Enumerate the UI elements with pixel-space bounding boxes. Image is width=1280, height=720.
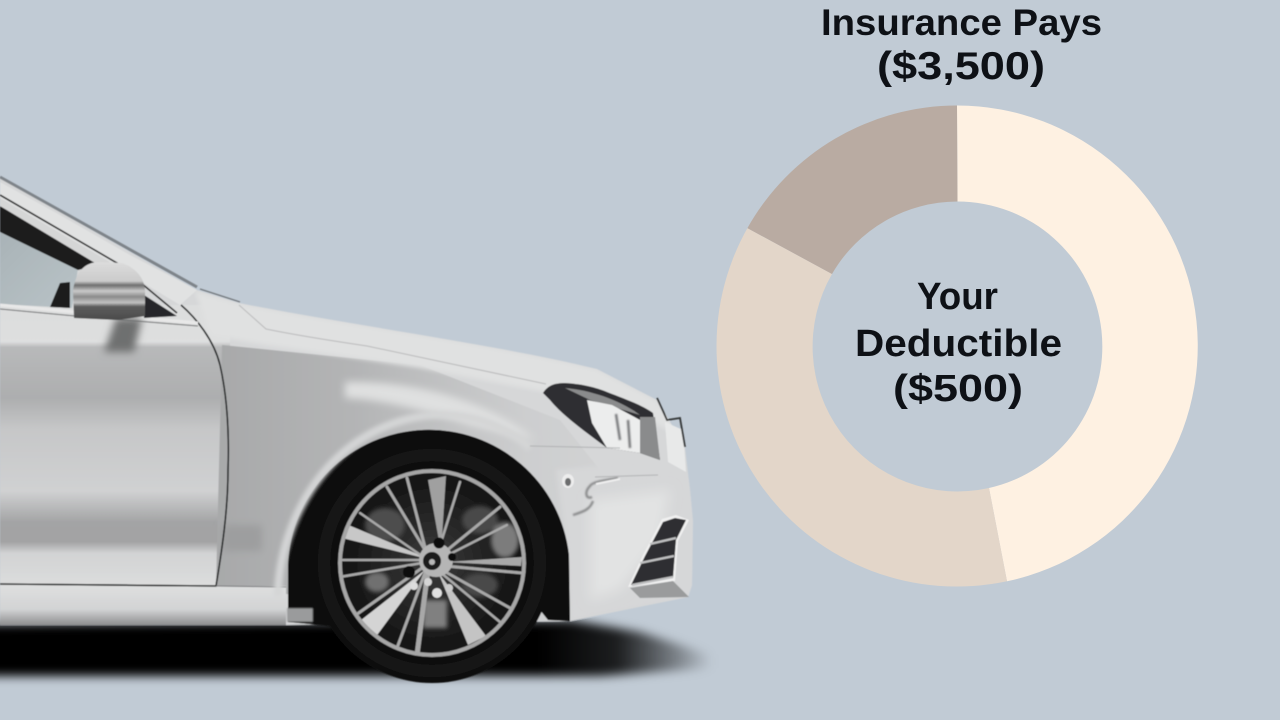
rim outer ring xyxy=(340,471,524,655)
segment: mid beige xyxy=(716,228,1007,587)
car: silver sedan front quarter xyxy=(0,170,712,683)
mirror stalk shadow xyxy=(104,318,142,352)
headlight side panel xyxy=(640,417,660,460)
windshield edge xyxy=(0,177,197,287)
segment: deductible share, taupe xyxy=(747,106,958,274)
tire xyxy=(312,443,552,683)
dent damage xyxy=(562,474,620,515)
windshield base edge xyxy=(200,289,240,302)
hood surface xyxy=(200,296,670,426)
door panel xyxy=(0,344,230,552)
lower body line xyxy=(216,586,286,587)
a-pillar lower strip xyxy=(0,198,110,266)
side window glass xyxy=(0,232,78,308)
label: your deductible xyxy=(855,276,1062,410)
fender lower shading xyxy=(222,525,262,551)
label: your deductible: Deductible xyxy=(855,323,1062,365)
hood crease line xyxy=(239,305,546,384)
a-pillar dark seam xyxy=(0,195,177,313)
wheel xyxy=(312,443,552,683)
mirror base xyxy=(50,282,70,308)
dark corner behind mirror xyxy=(144,295,177,318)
label: your deductible: Your xyxy=(917,276,998,318)
car body shell xyxy=(0,170,700,630)
label: insurance pays: ($3,500) xyxy=(877,45,1045,88)
belt line trim xyxy=(0,305,198,323)
fender highlight xyxy=(345,382,535,440)
headlight upper band xyxy=(565,388,640,415)
rim background xyxy=(339,470,525,656)
bumper highlight xyxy=(594,496,664,592)
hub and lug nuts xyxy=(403,538,456,598)
sill xyxy=(0,586,286,625)
segment: insurance share, cream xyxy=(957,105,1198,581)
brake details xyxy=(365,506,519,628)
headlight xyxy=(543,383,660,460)
label: your deductible: ($500) xyxy=(893,368,1023,410)
door shut line xyxy=(0,305,228,586)
label: insurance pays: Insurance Pays xyxy=(821,2,1102,43)
grille xyxy=(657,398,686,472)
fender panel xyxy=(216,345,576,622)
wheel arch xyxy=(288,430,570,640)
headlight lens detail xyxy=(616,414,630,448)
tire sidewall xyxy=(324,455,540,671)
headlight lens xyxy=(587,400,640,453)
sill gap xyxy=(287,608,313,622)
rim spokes xyxy=(340,476,522,655)
bumper surface xyxy=(566,544,576,622)
wheel arch lip xyxy=(278,415,530,596)
donut chart xyxy=(716,105,1198,587)
belt line shadow xyxy=(0,309,198,326)
headlight housing xyxy=(543,383,660,460)
bumper air vent xyxy=(628,515,689,598)
side mirror xyxy=(73,262,145,320)
dark window trim xyxy=(0,206,110,270)
ground shadow under car xyxy=(0,620,712,676)
a-pillar xyxy=(0,182,197,305)
bumper upper seam xyxy=(530,446,658,477)
label: insurance pays xyxy=(821,2,1102,88)
